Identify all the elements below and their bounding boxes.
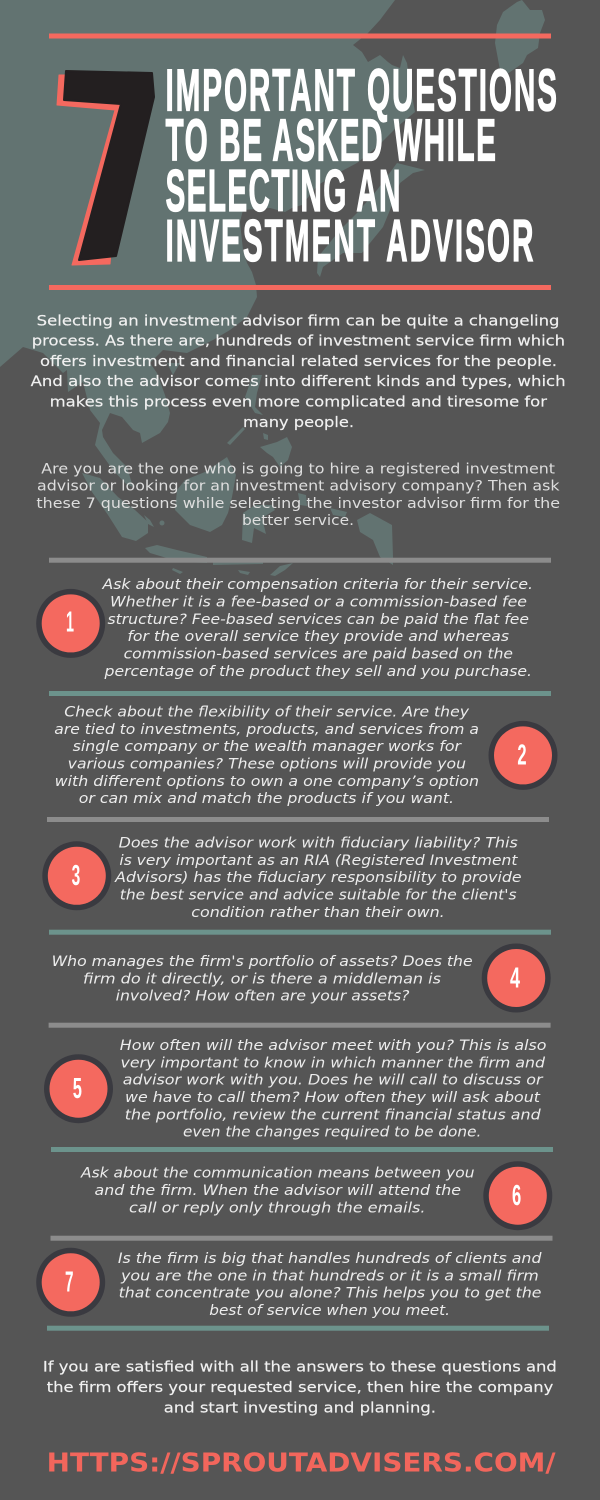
closing paragraph [43, 1360, 557, 1416]
question 2 text [54, 705, 479, 807]
intro paragraph: process. As there are, hundreds of investment service firm which [32, 334, 565, 350]
background map of Asia [0, 0, 545, 576]
question 3 [42, 836, 522, 921]
icon: number badge 2 [488, 721, 558, 790]
title: INVESTMENT ADVISOR [166, 207, 534, 274]
question 5 text: How often will the advisor meet with you? This is also [120, 1038, 547, 1054]
question 3 text: condition rather than their own. [191, 905, 445, 921]
top title rule [49, 34, 551, 38]
icon: number badge 6 [483, 1161, 552, 1230]
question 3 text: the best service and advice suitable for the client's [120, 888, 517, 904]
question 6 text: Ask about the communication means between you [80, 1166, 474, 1182]
question 3 text: Advisors) has the fiduciary responsibility to provide [114, 870, 522, 886]
question 4 text: involved? How often are your assets? [116, 989, 410, 1005]
icon: number badge 5 [44, 1054, 113, 1123]
question 2 [54, 705, 558, 807]
second intro paragraph: Are you are the one who is going to hire a registered investment [41, 462, 556, 478]
question 4 text [52, 954, 473, 1005]
title [166, 56, 557, 274]
second intro paragraph: advisor or looking for an investment advisory company? Then ask [37, 479, 560, 495]
title: TO BE ASKED WHILE [166, 106, 496, 173]
closing paragraph: and start investing and planning. [164, 1400, 436, 1416]
question 5 text: advisor work with you. Does he will call to discuss or [123, 1073, 544, 1089]
intro paragraph: And also the advisor comes into different kinds and types, which [31, 374, 566, 390]
intro paragraph: Selecting an investment advisor firm can be quite a changeling [37, 314, 559, 330]
question 7 text [118, 1251, 542, 1319]
icon: number badge 5: 5 [73, 1073, 82, 1105]
question 1 text: percentage of the product they sell and you purchase. [103, 664, 532, 680]
icon: number badge 6: 6 [512, 1180, 521, 1212]
question 3 text: is very important as an RIA (Registered Investment [119, 853, 519, 869]
question 6 text: call or reply only through the emails. [129, 1200, 426, 1216]
icon: number badge 4 [482, 944, 551, 1012]
icon: number badge 7 [36, 1248, 105, 1317]
icon: number badge 2: 2 [517, 740, 527, 772]
question 1 text: Whether it is a fee-based or a commission-based fee [110, 595, 527, 611]
bottom title rule [49, 285, 551, 290]
question 2 text: with different options to own a one company’s option [55, 774, 479, 790]
question 5 text: even the changes required to be done. [183, 1124, 481, 1140]
question 1 text: commission-based services are paid based on the [124, 647, 513, 663]
title: SELECTING AN [166, 157, 400, 224]
title: IMPORTANT QUESTIONS [166, 56, 557, 123]
question 5 text: we have to call them? How often they will ask about [125, 1090, 541, 1106]
icon: number badge 4: 4 [510, 962, 520, 994]
question 5 [44, 1038, 547, 1140]
question 5 text: very important to know in which manner the firm and [120, 1055, 546, 1071]
question 4 [52, 944, 551, 1012]
question 2 text: or can mix and match the products if you want. [79, 791, 454, 807]
intro paragraph [31, 314, 566, 431]
question 6 text [80, 1166, 474, 1216]
question 7 text: Is the firm is big that handles hundreds of clients and [118, 1251, 542, 1267]
second intro paragraph: these 7 questions while selecting the investor advisor firm for the [36, 496, 560, 512]
intro paragraph: offers investment and financial related services for the people. [40, 354, 557, 370]
icon: number badge 3: 3 [72, 860, 80, 892]
question 7 text: you are the one in that hundreds or it is a small firm [120, 1268, 539, 1284]
question 1 text: structure? Fee-based services can be paid the flat fee [108, 612, 529, 628]
question 1 text: Ask about their compensation criteria for their service. [101, 577, 533, 593]
question 5 text [120, 1038, 547, 1140]
icon: number badge 1: 1 [66, 607, 74, 639]
question 6 text: and the firm. When the advisor will attend the [94, 1183, 461, 1199]
question 2 text: Check about the flexibility of their service. Are they [64, 705, 469, 721]
question 3 text: Does the advisor work with fiduciary liability? This [119, 836, 518, 852]
question 7 text: best of service when you meet. [209, 1303, 450, 1319]
question 1 text [101, 577, 533, 680]
website url: HTTPS://SPROUTADVISERS.COM/ [47, 1449, 556, 1479]
intro paragraph: many people. [243, 415, 354, 431]
question 2 text: are tied to investments, products, and services from a [54, 722, 479, 738]
question 4 text: Who manages the firm's portfolio of assets? Does the [52, 954, 473, 970]
icon: number badge 1 [36, 589, 105, 658]
question 1 [36, 577, 533, 680]
intro paragraph: makes this process even more complicated and tiresome for [50, 395, 547, 411]
closing paragraph: the firm offers your requested service, then hire the company [47, 1380, 554, 1396]
question 7 [36, 1248, 542, 1319]
question 2 text: various companies? These options will provide you [68, 757, 466, 773]
second intro paragraph: better service. [242, 513, 354, 529]
closing paragraph: If you are satisfied with all the answers to these questions and [43, 1360, 557, 1376]
second intro paragraph [36, 462, 560, 529]
icon: number badge 7: 7 [65, 1267, 74, 1299]
question 7 text: that concentrate you alone? This helps you to get the [119, 1286, 542, 1302]
question 3 text [114, 836, 522, 921]
question 4 text: firm do it directly, or is there a middleman is [83, 971, 441, 987]
icon: number badge 3 [42, 841, 111, 910]
question 5 text: the portfolio, review the current financial status and [125, 1107, 542, 1123]
question 2 text: single company or the wealth manager works for [73, 739, 462, 755]
icon: big number 7 [57, 71, 154, 265]
question 1 text: for the overall service they provide and whereas [127, 629, 509, 645]
question 6 [80, 1161, 552, 1230]
